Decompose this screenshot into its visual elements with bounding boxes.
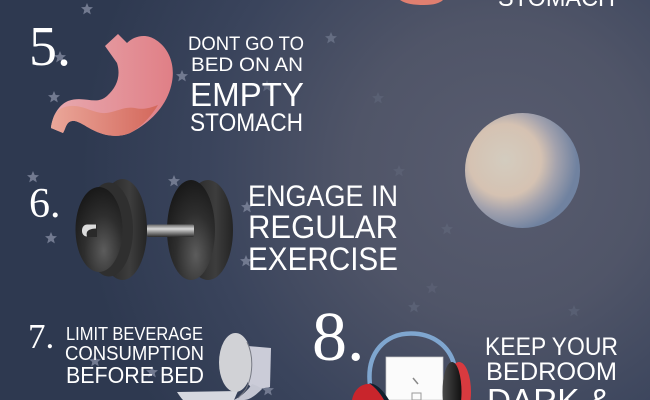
text: engage in regular exercise: [248, 180, 398, 277]
text: keep your bedroom dark: BEDROOM: [486, 358, 617, 386]
text: don't go to bed: BED ON AN: [191, 54, 303, 76]
text: limit beverage: [65, 324, 204, 388]
text: keep your bedroom dark: KEEP YOUR: [485, 333, 618, 361]
text: limit beverage: LIMIT BEVERAGE: [66, 324, 203, 344]
text: limit beverage: CONSUMPTION: [65, 343, 204, 365]
text: don't go to bed: [188, 33, 304, 137]
icon: toilet: [177, 333, 271, 400]
icon: headphones and light switch: [352, 334, 471, 400]
text: engage in regular exercise: EXERCISE: [248, 241, 398, 277]
icon: stomach fragment at top: [400, 0, 443, 5]
text: keep your bedroom dark: [485, 333, 618, 400]
text: limit beverage: BEFORE BED: [66, 362, 204, 388]
text: engage in regular exercise: ENGAGE IN: [248, 180, 398, 213]
number 6: 6.: [29, 181, 60, 227]
text: don't go to bed: STOMACH: [190, 109, 303, 137]
text: don't go to bed: EMPTY: [190, 77, 304, 114]
number 7: 7.: [28, 317, 54, 356]
number 5: 5.: [29, 16, 71, 78]
text: engage in regular exercise: REGULAR: [248, 209, 398, 245]
text: don't go to bed: DONT GO TO: [188, 33, 304, 55]
icon: dumbbell: [76, 179, 233, 280]
moon: [465, 113, 580, 228]
icon: stomach: [51, 34, 173, 136]
number 8: 8.: [312, 299, 364, 376]
